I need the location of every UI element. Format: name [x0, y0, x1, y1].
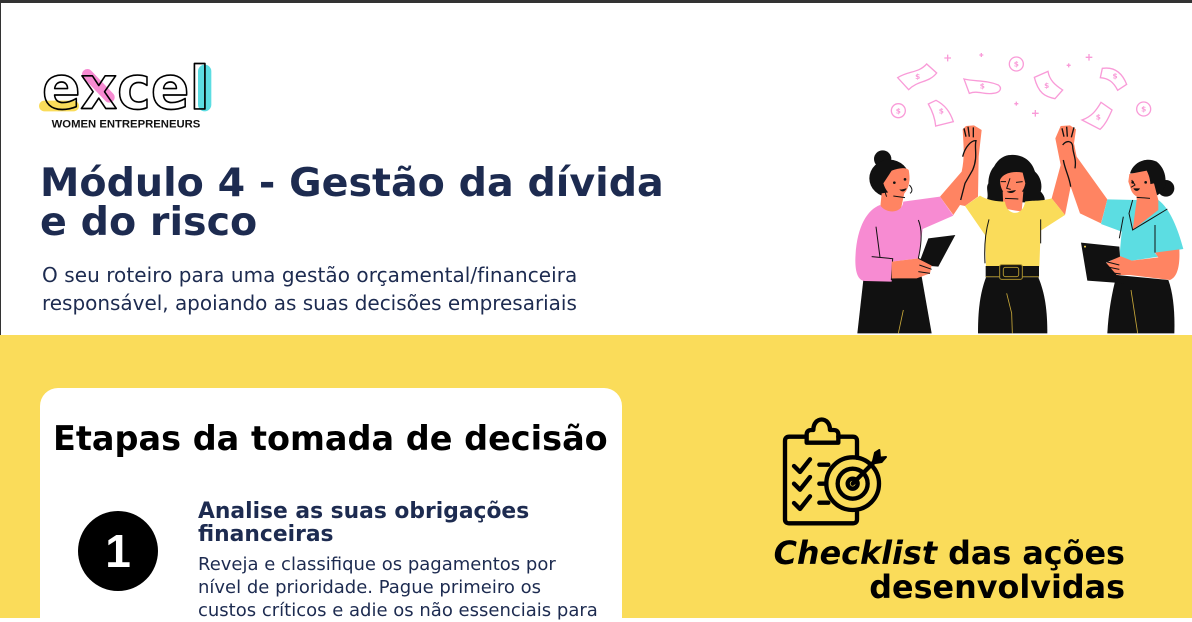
- logo: excel women entrepreneurs: WOMEN ENTREPRENEURS: [52, 118, 200, 130]
- left border: [0, 0, 1, 335]
- illustration: flying money: [890, 53, 1152, 130]
- heading: checklist of actions: desenvolvidas: [869, 569, 1125, 606]
- heading: checklist of actions: Checklist das ações: [774, 535, 1125, 572]
- step heading: [198, 499, 529, 547]
- top border: [0, 0, 1192, 3]
- title: Módulo 4 - Gestão da dívida: [40, 160, 664, 206]
- illustration: flying money: $: [1112, 72, 1118, 81]
- heading: decision steps: Etapas da tomada de decisão: [53, 419, 608, 458]
- step heading: financeiras: [198, 522, 334, 547]
- illustration: flying money: $: [896, 106, 901, 115]
- center woman: [978, 277, 1047, 333]
- step description: Reveja e classifique os pagamentos por: [198, 554, 556, 575]
- step description: custos críticos e adie os não essenciais para: [198, 600, 598, 621]
- illustration: flying money: $: [980, 82, 985, 91]
- illustration: flying money: $: [939, 107, 944, 116]
- panel: decision steps card: [40, 388, 622, 618]
- step number 1: [78, 511, 158, 591]
- heading: checklist of actions: [774, 535, 1125, 606]
- icon: clipboard checklist with target: [782, 417, 887, 526]
- subtitle: O seu roteiro para uma gestão orçamental/financeira: [42, 263, 577, 287]
- illustration: flying money: $: [1044, 81, 1049, 90]
- raised arms and hands: [940, 125, 1107, 223]
- illustration: flying money: $: [1096, 112, 1101, 121]
- right woman: [1107, 275, 1174, 333]
- title: e do risco: [40, 199, 257, 245]
- subtitle: [42, 263, 577, 315]
- step number 1: 1: [105, 525, 131, 577]
- step description: [198, 554, 598, 621]
- title: [40, 160, 664, 245]
- subtitle: responsável, apoiando as suas decisões empresariais: [42, 291, 577, 315]
- logo: excel women entrepreneurs: exce: [42, 53, 189, 123]
- left woman: [857, 277, 932, 333]
- illustration: flying money: $: [1141, 105, 1146, 114]
- step description: nível de prioridade. Pague primeiro os: [198, 577, 541, 598]
- illustration: flying money: $: [1014, 60, 1019, 69]
- step heading: Analise as suas obrigações: [198, 499, 529, 524]
- logo: excel women entrepreneurs: l: [189, 54, 210, 124]
- yellow section background: [0, 335, 1192, 618]
- illustration: three women high-fiving: [855, 125, 1184, 334]
- illustration: flying money: $: [915, 72, 920, 81]
